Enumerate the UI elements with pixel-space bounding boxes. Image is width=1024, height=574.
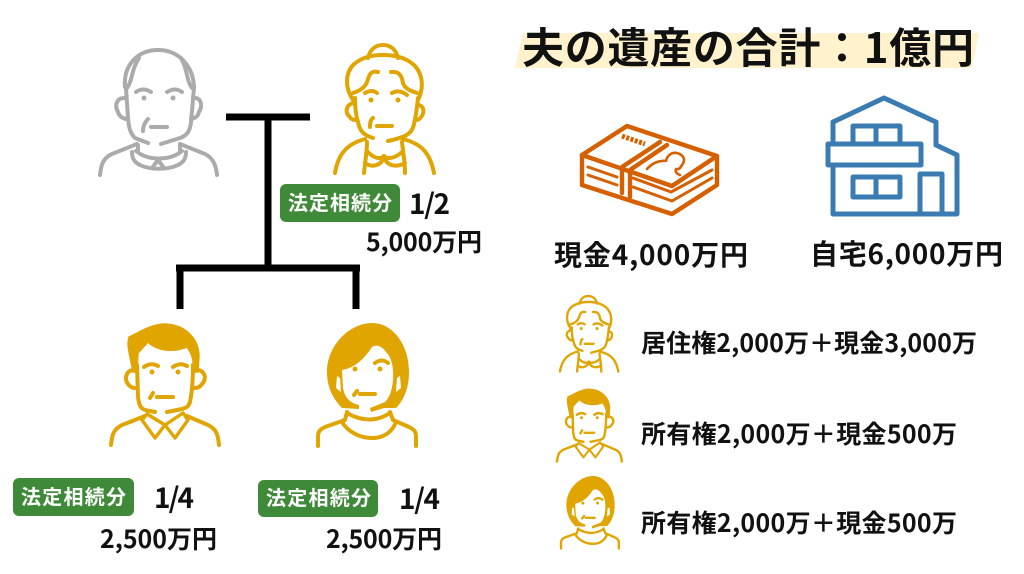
text: wife split: 居住権2,000万＋現金3,000万 [641, 324, 977, 360]
icon: son [111, 324, 219, 445]
family tree connector [176, 117, 360, 309]
text: daughter amount: 2,500万円 [326, 520, 442, 556]
badge: son legal share [13, 478, 134, 516]
title with highlight: 夫の遺産の合計：1億円 [522, 15, 974, 76]
text: daughter fraction: 1/4 [399, 478, 440, 518]
icon: wife small [560, 296, 618, 372]
icon: daughter small [561, 476, 619, 549]
text: son split: 所有権2,000万＋現金500万 [641, 415, 957, 451]
text: wife fraction: 1/2 [409, 183, 450, 223]
text: wife amount: 5,000万円 [366, 223, 482, 259]
badge: daughter legal share: 法定相続分 [266, 482, 371, 511]
badge: daughter legal share [258, 480, 378, 517]
badge: wife legal share [280, 184, 400, 222]
icon: house [828, 98, 957, 214]
text: home amount: 自宅6,000万円 [810, 233, 1003, 273]
text: son amount: 2,500万円 [100, 520, 217, 556]
icon: son small [557, 389, 622, 462]
text: cash amount: 現金4,000万円 [554, 234, 748, 274]
icon: grandmother (wife) [335, 45, 434, 173]
text: son fraction: 1/4 [154, 477, 194, 517]
text: daughter split: 所有権2,000万＋現金500万 [641, 504, 957, 540]
icon: daughter [318, 323, 416, 446]
badge: wife legal share: 法定相続分 [288, 187, 392, 216]
icon: grandfather (deceased husband) [100, 50, 217, 175]
badge: son legal share: 法定相続分 [21, 481, 126, 510]
icon: banknote stack [582, 126, 717, 214]
